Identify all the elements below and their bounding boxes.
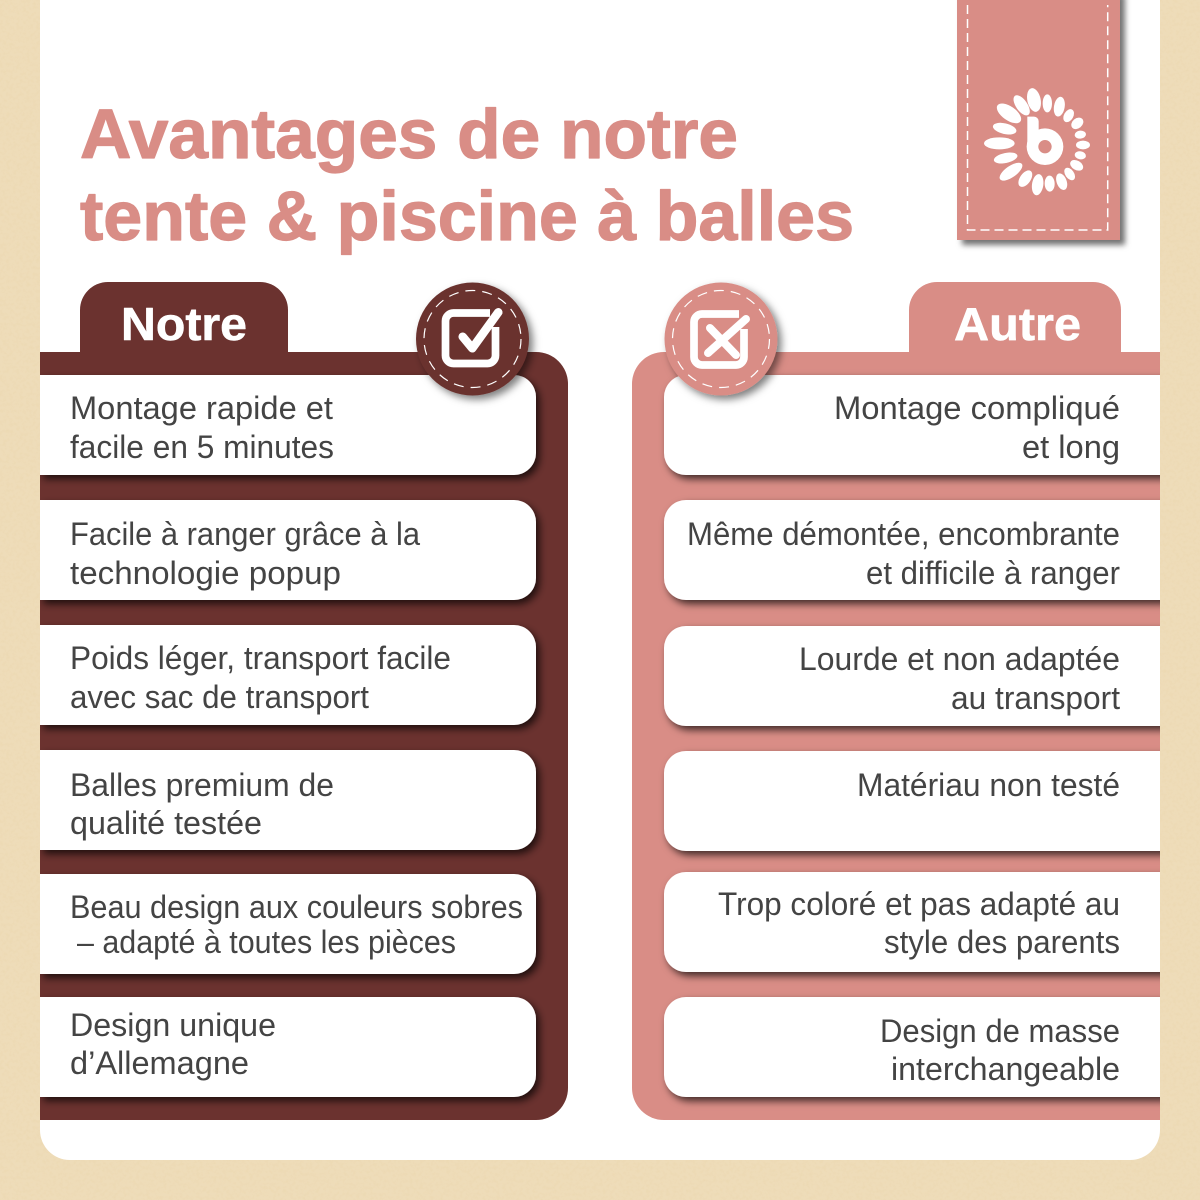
- row 1: facile en 5 minutes: [70, 429, 334, 465]
- icon: sun logo: [984, 87, 1090, 196]
- row 2: Facile à ranger grâce à la: [70, 516, 420, 552]
- row 1: Montage compliqué: [834, 390, 1120, 426]
- row 6: Design de masse: [880, 1013, 1120, 1049]
- row 6: [664, 997, 1170, 1097]
- row 2: technologie popup: [70, 555, 341, 591]
- tab: Autre: Autre: [954, 298, 1081, 350]
- row 4: Balles premium de: [70, 767, 334, 803]
- row 2: [40, 500, 536, 600]
- row 6: Design unique: [70, 1007, 276, 1043]
- tab: Notre: Notre: [121, 298, 247, 350]
- title: tente & piscine à balles: [80, 177, 854, 255]
- title: Avantages de notre: [80, 95, 738, 173]
- row 3: [40, 625, 536, 725]
- row 4: qualité testée: [70, 805, 262, 841]
- row 5: Trop coloré et pas adapté au: [718, 886, 1120, 922]
- row 3: Lourde et non adaptée: [799, 641, 1120, 677]
- icon: cross badge: [664, 282, 778, 396]
- row 1: [40, 375, 536, 475]
- tab: Autre: [909, 282, 1121, 356]
- row 2: et difficile à ranger: [866, 555, 1120, 591]
- row 6: [40, 997, 536, 1097]
- row 5: style des parents: [884, 924, 1120, 960]
- row 6: interchangeable: [891, 1051, 1120, 1087]
- panel: Autre: [632, 282, 1170, 1120]
- row 3: au transport: [951, 680, 1120, 716]
- row 5: [664, 872, 1170, 972]
- icon: check badge: [416, 282, 529, 396]
- row 5: – adapté à toutes les pièces: [77, 924, 456, 960]
- row 3: avec sac de transport: [70, 679, 369, 715]
- brand tag: [957, 0, 1120, 240]
- row 4: [40, 750, 536, 850]
- panel background: Notre: [40, 352, 568, 1120]
- row 2: [664, 500, 1170, 600]
- title: [80, 95, 854, 255]
- row 3: Poids léger, transport facile: [70, 640, 451, 676]
- row 5: [40, 874, 536, 974]
- row 4: [664, 751, 1170, 851]
- row 1: et long: [1022, 429, 1120, 465]
- panel background: Autre: [632, 352, 1160, 1120]
- tab: Notre: [80, 282, 288, 356]
- row 4: Matériau non testé: [857, 767, 1120, 803]
- row 1: [664, 375, 1170, 475]
- panel: Notre: [40, 282, 568, 1120]
- row 1: Montage rapide et: [70, 390, 333, 426]
- row 2: Même démontée, encombrante: [687, 516, 1120, 552]
- row 5: Beau design aux couleurs sobres: [70, 889, 523, 925]
- row 6: d’Allemagne: [70, 1045, 249, 1081]
- row 3: [664, 626, 1170, 726]
